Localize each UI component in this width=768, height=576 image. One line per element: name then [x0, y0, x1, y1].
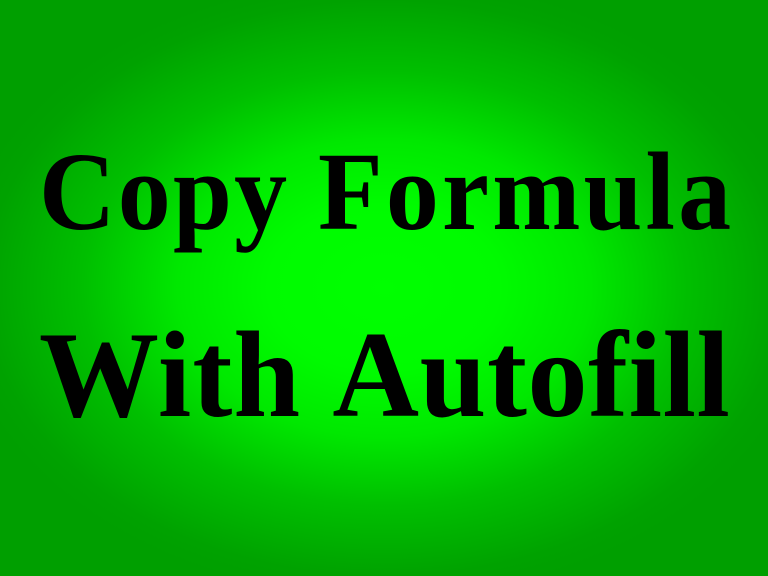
- title line 2: With Autofill: [39, 308, 730, 443]
- title line 1: Copy Formula: [39, 131, 734, 254]
